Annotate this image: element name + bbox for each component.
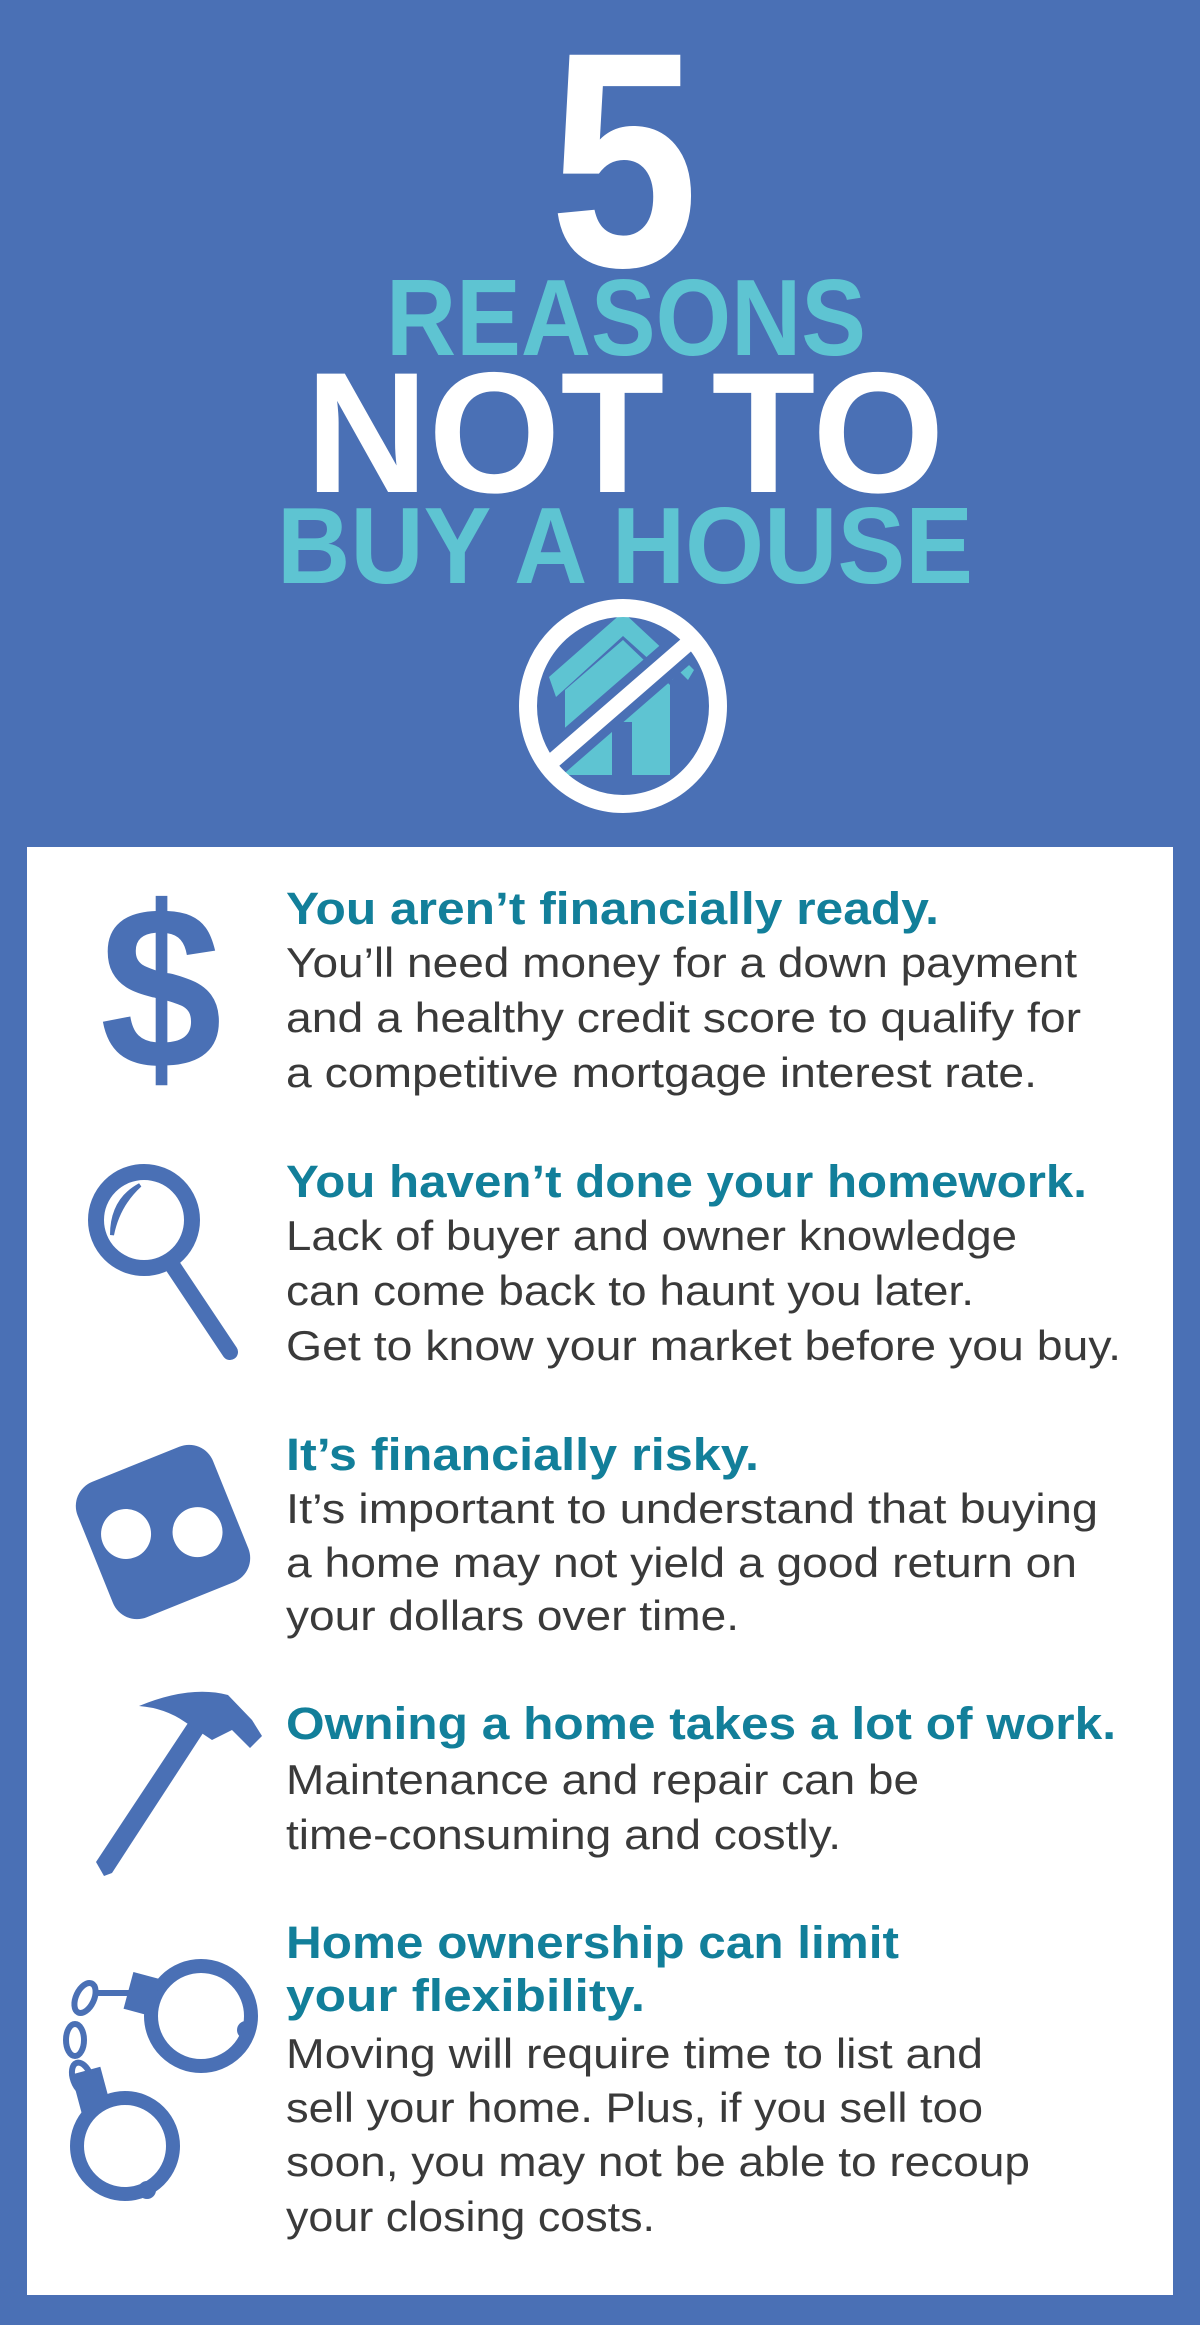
item 2: homework: Get to know your market before you buy.: [286, 1322, 1121, 1369]
item 5: flexibility: sell your home. Plus, if you sell too: [286, 2084, 983, 2131]
item 4: work: time-consuming and costly.: [286, 1811, 841, 1858]
item 5: flexibility: your flexibility.: [286, 1970, 645, 2021]
item 2: homework: You haven’t done your homework.: [286, 1156, 1087, 1207]
icon: no house: [528, 608, 718, 804]
title: BUY A HOUSE: [277, 485, 973, 607]
title: NOT TO: [306, 337, 944, 529]
icon: die: [68, 1437, 258, 1627]
item 4: work: Maintenance and repair can be: [286, 1756, 919, 1803]
item 5: flexibility: your closing costs.: [286, 2193, 655, 2240]
item 3: risky: [68, 1429, 1098, 1639]
item 3: risky: your dollars over time.: [286, 1592, 739, 1639]
item 1: financially ready: a competitive mortgage interest rate.: [286, 1049, 1037, 1096]
item 4: work: [96, 1692, 1116, 1876]
item 2: homework: [96, 1156, 1121, 1369]
white panel: [27, 847, 1173, 2295]
item 3: risky: It’s financially risky.: [286, 1429, 759, 1480]
item 1: financially ready: [100, 859, 1081, 1118]
title: [277, 0, 973, 607]
title: REASONS: [386, 257, 866, 379]
item 1: financially ready: You aren’t financially ready.: [286, 883, 939, 934]
item 5: flexibility: Home ownership can limit: [286, 1917, 899, 1968]
item 1: financially ready: You’ll need money for a down payment: [286, 939, 1077, 986]
item 5: flexibility: soon, you may not be able to recoup: [286, 2138, 1030, 2185]
item 5: flexibility: [66, 1917, 1030, 2240]
item 3: risky: a home may not yield a good return on: [286, 1539, 1077, 1586]
icon: hammer: [96, 1692, 262, 1876]
icon: handcuffs: [66, 1966, 255, 2199]
item 2: homework: can come back to haunt you later.: [286, 1267, 974, 1314]
icon: dollar: $: [100, 859, 222, 1118]
item 1: financially ready: and a healthy credit score to qualify for: [286, 994, 1081, 1041]
item 5: flexibility: Moving will require time to list and: [286, 2030, 983, 2077]
item 3: risky: It’s important to understand that buying: [286, 1485, 1098, 1532]
item 4: work: Owning a home takes a lot of work.: [286, 1698, 1116, 1749]
item 2: homework: Lack of buyer and owner knowledge: [286, 1212, 1017, 1259]
icon: magnifier: [96, 1172, 230, 1352]
